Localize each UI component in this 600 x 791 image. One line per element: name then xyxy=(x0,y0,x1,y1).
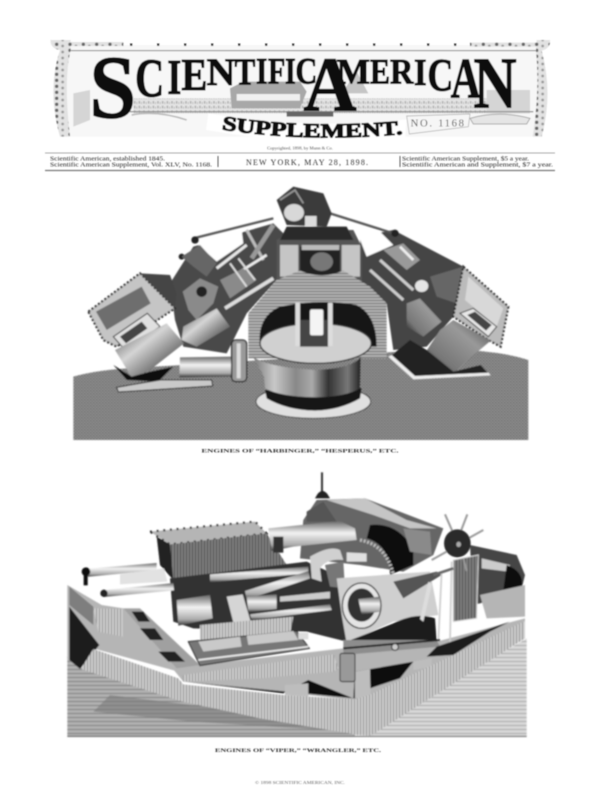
masthead title: SCIENTIFIC AMERICAN: E xyxy=(181,50,207,100)
left cylinder xyxy=(115,323,184,377)
dateline block xyxy=(45,153,555,170)
left dateline xyxy=(50,156,213,168)
ribbed foundation band xyxy=(81,621,525,736)
masthead xyxy=(50,38,550,139)
harbour skyline vignette xyxy=(73,72,533,127)
masthead title: SCIENTIFIC AMERICAN: S xyxy=(89,38,136,137)
masthead title: SCIENTIFIC AMERICAN: I xyxy=(256,52,267,93)
date: NEW YORK, MAY 28, 1898. xyxy=(246,158,368,167)
inner deck xyxy=(123,608,525,700)
right cylinder box xyxy=(388,267,508,379)
caption: top engines: ENGINES OF “HARBINGER,” “HESPERUS,” ETC. xyxy=(202,448,399,454)
right planked ground xyxy=(370,638,527,737)
right rear machinery xyxy=(470,545,525,618)
masthead frame xyxy=(51,40,550,137)
main deck edge xyxy=(343,622,510,657)
upper cylinder xyxy=(268,521,357,553)
right dateline: Scientific American and Supplement, $7 a year. xyxy=(402,162,554,168)
left dateline: Scientific American, established 1845. xyxy=(50,156,166,162)
masthead title: SCIENTIFIC AMERICAN: F xyxy=(268,52,285,93)
masthead title: SCIENTIFIC AMERICAN: E xyxy=(370,51,390,91)
right ribbed panel xyxy=(433,555,478,643)
crank disc xyxy=(260,323,371,363)
masthead title: SCIENTIFIC AMERICAN: I xyxy=(285,52,296,93)
masthead title: SCIENTIFIC AMERICAN: A xyxy=(303,42,357,128)
masthead title: SCIENTIFIC AMERICAN: C xyxy=(427,50,453,102)
piston frame xyxy=(295,303,333,347)
issue number xyxy=(407,114,470,134)
right cylinder xyxy=(427,320,491,373)
masthead title: SCIENTIFIC AMERICAN xyxy=(89,38,517,137)
caption: bottom engines: ENGINES OF “VIPER,” “WRANGLER,” ETC. xyxy=(215,748,382,754)
hatched arch housing xyxy=(248,271,387,358)
base flange xyxy=(256,385,371,418)
arch opening xyxy=(260,302,377,347)
upper column xyxy=(277,227,362,283)
bottom border xyxy=(67,735,527,738)
footer credit: © 1898 SCIENTIFIC AMERICAN, INC. xyxy=(255,780,345,786)
issue number: NO. 1168 xyxy=(411,119,464,130)
masthead title: SCIENTIFIC AMERICAN: I xyxy=(414,52,427,94)
left base block xyxy=(67,585,200,672)
copyright line: Copyrighted, 1898, by Munn & Co. xyxy=(267,146,333,152)
masthead title: SCIENTIFIC AMERICAN: T xyxy=(235,51,255,93)
left planked ground xyxy=(67,657,355,737)
left bed plate and pipe xyxy=(117,340,247,392)
engraving: engines of Harbinger xyxy=(73,187,528,440)
checker plate floor xyxy=(73,350,528,440)
left tubes xyxy=(82,548,367,626)
right valve gear xyxy=(330,213,463,350)
crank frame xyxy=(337,572,442,643)
right dateline: Scientific American Supplement, $5 a year. xyxy=(402,156,530,162)
masthead title: SCIENTIFIC AMERICAN: M xyxy=(337,51,370,91)
masthead title: SCIENTIFIC AMERICAN: I xyxy=(167,48,181,104)
left cylinder box xyxy=(88,273,184,382)
masthead title: SCIENTIFIC AMERICAN: A xyxy=(451,48,481,110)
mid machinery shadow xyxy=(170,562,347,642)
masthead title: SCIENTIFIC AMERICAN: R xyxy=(390,51,414,91)
lower deck recess xyxy=(183,653,432,698)
hand wheel xyxy=(432,514,483,571)
masthead title: SCIENTIFIC AMERICAN: N xyxy=(207,50,235,94)
top valve head xyxy=(277,187,332,227)
left dateline: Scientific American Supplement, Vol. XLV, No. 1168. xyxy=(50,162,213,168)
right dateline xyxy=(402,156,554,168)
masthead title: SCIENTIFIC AMERICAN: C xyxy=(135,48,164,109)
ground shade band xyxy=(93,695,355,732)
rear housing xyxy=(300,472,443,575)
engraving: engines of Viper xyxy=(67,472,527,737)
masthead title: SCIENTIFIC AMERICAN: C xyxy=(295,52,317,93)
condenser plate xyxy=(188,617,309,666)
drum xyxy=(253,356,361,397)
supplement banner: SUPPLEMENT. xyxy=(222,116,403,139)
ribbed boiler box xyxy=(150,522,287,580)
masthead title: SCIENTIFIC AMERICAN: N xyxy=(473,42,517,123)
left valve gear xyxy=(170,218,287,353)
